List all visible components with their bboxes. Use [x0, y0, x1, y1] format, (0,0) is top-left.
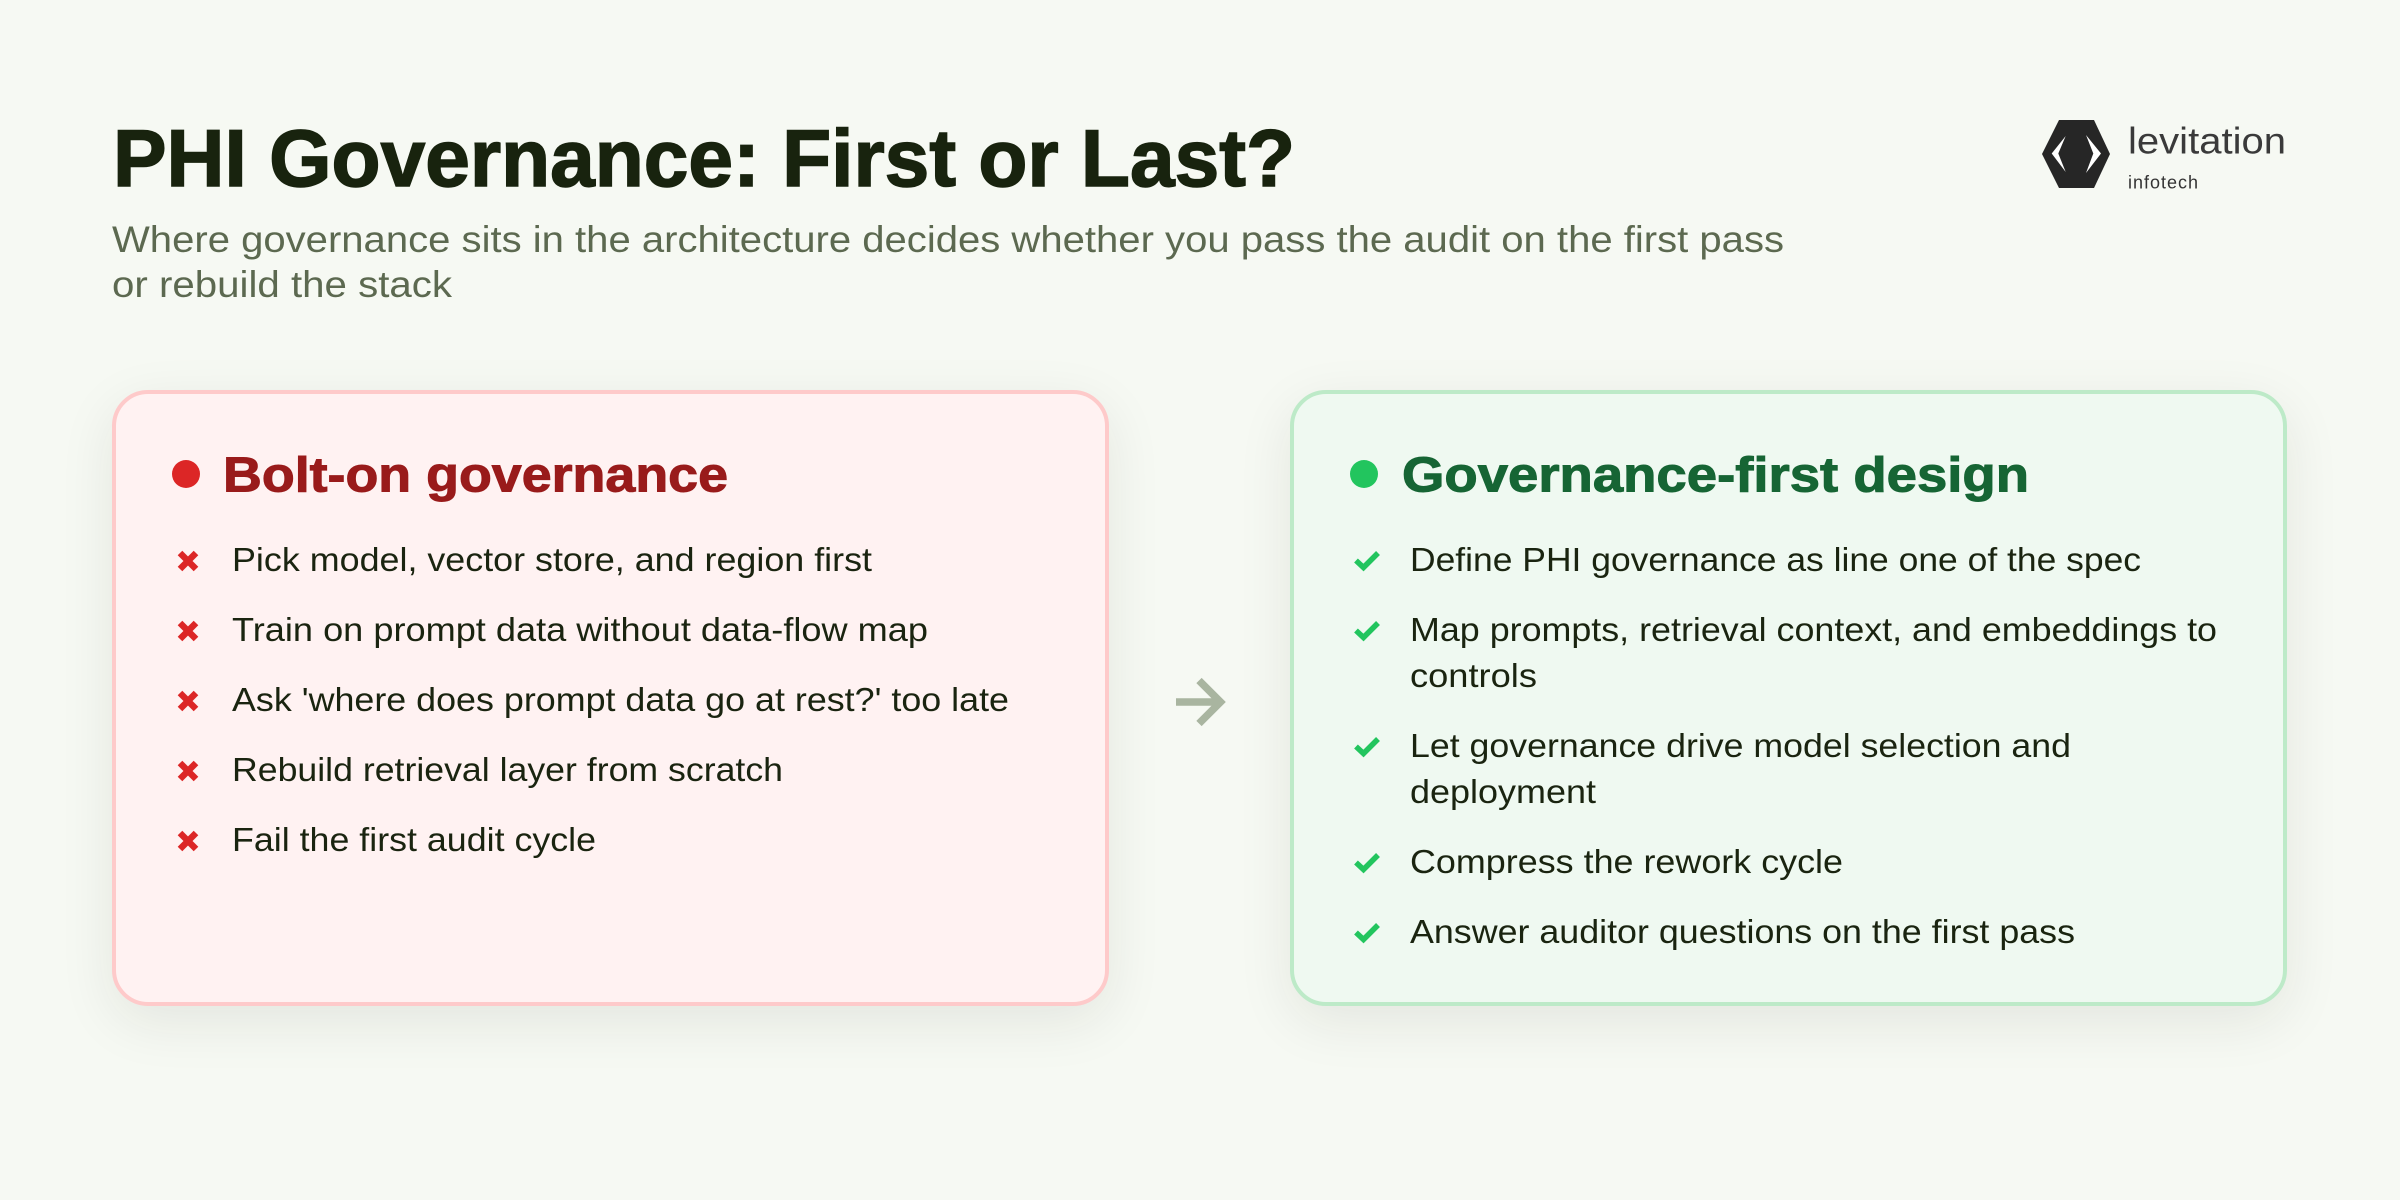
subtitle [112, 219, 1784, 305]
item: rebuild retrieval layer: Rebuild retrieval layer from scratch [232, 752, 783, 789]
subtitle: or rebuild the stack [112, 264, 453, 305]
title: PHI Governance: First or Last? [113, 114, 1295, 204]
icon: hexagon code mark [2042, 120, 2110, 188]
status dot: green [1350, 460, 1378, 488]
arrow [1176, 678, 1226, 726]
list: governance-first practices [1356, 542, 2217, 951]
item: let governance drive [1356, 728, 2071, 811]
item: answer auditor questions: Answer auditor questions on the first pass [1410, 914, 2075, 951]
item: define PHI governance: Define PHI governance as line one of the spec [1410, 542, 2141, 579]
panel: governance-first design [1290, 390, 2287, 1006]
item: fail the audit: Fail the first audit cycle [232, 822, 596, 859]
logo: levitation infotech [2042, 120, 2286, 192]
heading: governance-first design: Governance-first design [1402, 448, 2029, 502]
item: let governance drive: Let governance drive model selection and [1410, 728, 2071, 765]
item: ask where data goes: Ask 'where does prompt data go at rest?' too late [232, 682, 1009, 719]
heading: bolt-on governance: Bolt-on governance [223, 448, 728, 502]
item: map prompts: controls [1410, 658, 1537, 695]
item: train on prompt data: Train on prompt data without data-flow map [232, 612, 928, 649]
panel: bolt-on governance [112, 390, 1109, 1006]
item: map prompts: Map prompts, retrieval context, and embeddings to [1410, 612, 2217, 649]
logo tagline: infotech [2128, 172, 2198, 192]
status dot: red [172, 460, 200, 488]
logo wordmark: levitation [2128, 120, 2286, 162]
item: map prompts [1356, 612, 2217, 695]
item: let governance drive: deployment [1410, 774, 1597, 811]
subtitle: Where governance sits in the architecture decides whether you pass the audit on the first pass [112, 219, 1784, 260]
item: compress rework: Compress the rework cycle [1410, 844, 1843, 881]
item: pick model: Pick model, vector store, and region first [232, 542, 873, 579]
list: bolt-on failures [180, 542, 1009, 859]
